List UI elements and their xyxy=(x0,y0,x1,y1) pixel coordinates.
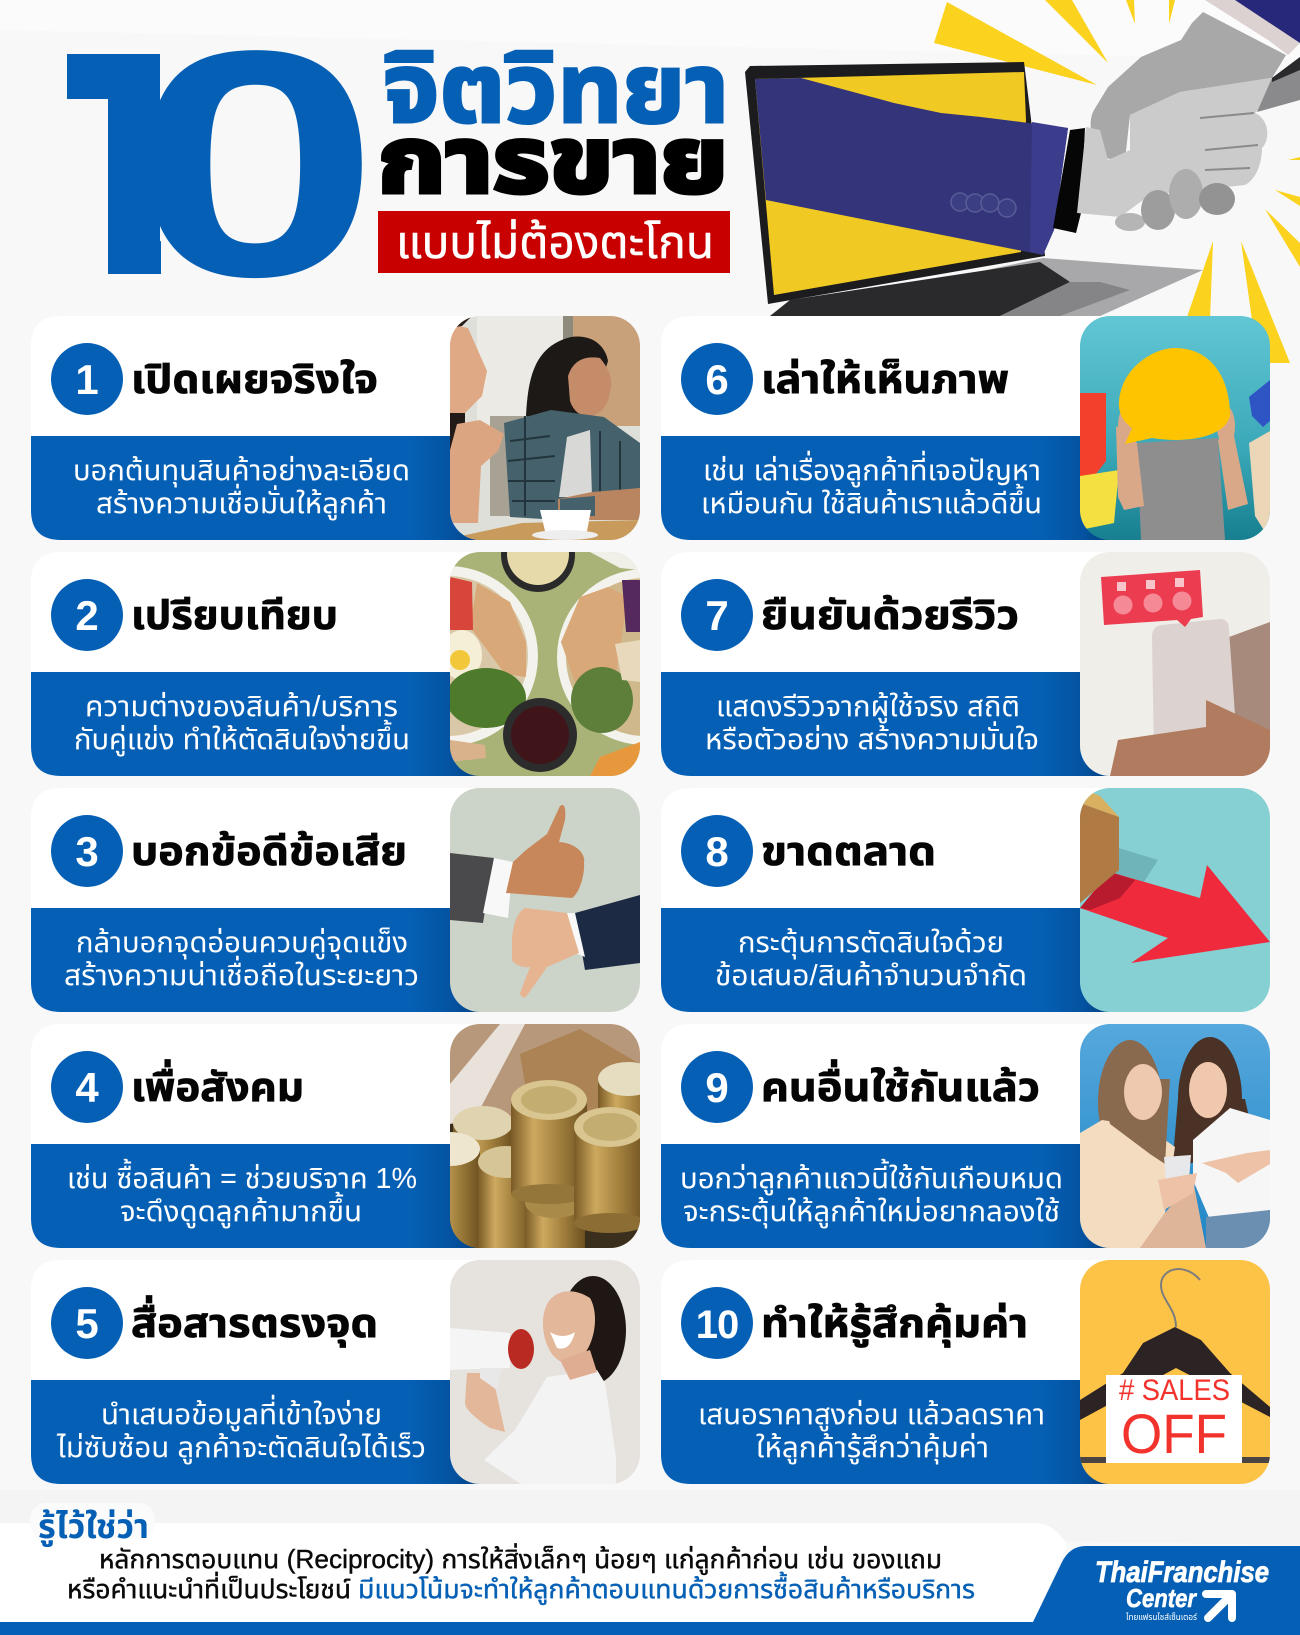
number badge 5 xyxy=(51,1287,123,1359)
number badge 4 xyxy=(51,1051,123,1123)
number badge 6 xyxy=(681,343,753,415)
number badge 1 xyxy=(51,343,123,415)
heading: คนอื่นใช้กันแล้ว xyxy=(761,1059,1040,1110)
photo: stacked tin cans xyxy=(450,1024,640,1248)
description: กระตุ้นการตัดสินใจด้วย xyxy=(738,927,1004,959)
card 3 xyxy=(31,788,640,1012)
photo: phone with review bubble xyxy=(1080,552,1270,776)
heading: เพื่อสังคม xyxy=(131,1059,304,1110)
header illustration: laptop with handshake xyxy=(745,0,1300,363)
description: กับคู่แข่ง ทำให้ตัดสินใจง่ายขึ้น xyxy=(74,719,410,757)
title line: จิตวิทยา: จิตวิทยา xyxy=(383,34,729,143)
heading: บอกข้อดีข้อเสีย xyxy=(131,829,407,874)
description: นำเสนอข้อมูลที่เข้าใจง่าย xyxy=(101,1394,382,1432)
number badge 9: 9 xyxy=(705,1064,729,1111)
description: สร้างความเชื่อมั่นให้ลูกค้า xyxy=(96,483,387,521)
photo: two women looking at a phone xyxy=(1080,1024,1270,1248)
footer text: หลักการตอบแทน (Reciprocity) การให้สิ่งเล็กๆ น้อยๆ แก่ลูกค้าก่อน เช่น ของแถม xyxy=(99,1543,942,1575)
handshake hands xyxy=(1077,12,1286,231)
description: สร้างความน่าเชื่อถือในระยะยาว xyxy=(64,955,419,992)
photo: hanger with sales tag xyxy=(1080,1260,1270,1484)
heading: ขาดตลาด xyxy=(761,830,936,874)
logo: ThaiFranchise Center xyxy=(1033,1546,1300,1622)
number badge 10: 10 xyxy=(696,1303,738,1347)
card 10 xyxy=(661,1260,1270,1484)
footer text with blue highlight: มีแนวโน้มจะทำให้ลูกค้าตอบแทนด้วยการซื้อสินค้าหรือบริการ xyxy=(358,1571,975,1605)
description: บอกต้นทุนสินค้าอย่างละเอียด xyxy=(73,455,410,487)
number badge 8: 8 xyxy=(705,828,729,875)
number badge 3: 3 xyxy=(75,828,99,875)
card 5 xyxy=(31,1260,640,1484)
heading: เล่าให้เห็นภาพ xyxy=(761,357,1009,402)
photo: woman with megaphone xyxy=(450,1260,640,1484)
yellow burst rays xyxy=(934,0,1300,363)
navy jacket sleeve xyxy=(755,78,1068,255)
description: จะดึงดูดลูกค้ามากขึ้น xyxy=(120,1191,362,1229)
card 9 xyxy=(661,1024,1270,1248)
heading: ยืนยันด้วยรีวิว xyxy=(761,593,1019,638)
logo: ThaiFranchise Center: Center xyxy=(1126,1583,1198,1613)
number badge 2 xyxy=(51,579,123,651)
number badge 5: 5 xyxy=(75,1300,99,1347)
number badge 9 xyxy=(681,1051,753,1123)
footer note panel xyxy=(0,1503,1067,1622)
card 6 xyxy=(661,316,1270,540)
heading: สื่อสารตรงจุด xyxy=(131,1295,378,1348)
description: เหมือนกัน ใช้สินค้าเราแล้วดีขึ้น xyxy=(701,483,1042,520)
bottom blue strip xyxy=(0,1622,1300,1635)
photo: couple talking in a cafe xyxy=(450,316,640,540)
description: ไม่ซับซ้อน ลูกค้าจะตัดสินใจได้เร็ว xyxy=(56,1432,426,1465)
description: แสดงรีวิวจากผู้ใช้จริง สถิติ xyxy=(716,691,1020,724)
description: เสนอราคาสูงก่อน แล้วลดราคา xyxy=(698,1399,1045,1432)
logo: ThaiFranchise Center: ThaiFranchise xyxy=(1095,1556,1269,1589)
title line: การขาย: การขาย xyxy=(378,110,728,212)
photo: red arrow and box xyxy=(1080,788,1270,1012)
red subtitle banner: แบบไม่ต้องตะโกน xyxy=(396,216,714,268)
sale sign: # SALES xyxy=(1119,1374,1230,1407)
laptop base xyxy=(770,258,1203,316)
card 1 xyxy=(31,316,640,540)
right shirt cuff and sleeve xyxy=(1205,0,1300,112)
big number 10 xyxy=(67,50,362,278)
number badge 3 xyxy=(51,815,123,887)
number badge 10 xyxy=(681,1287,753,1359)
description: ความต่างของสินค้า/บริการ xyxy=(85,691,398,723)
description: เช่น เล่าเรื่องลูกค้าที่เจอปัญหา xyxy=(703,450,1041,488)
card 8 xyxy=(661,788,1270,1012)
description: บอกว่าลูกค้าแถวนี้ใช้กันเกือบหมด xyxy=(680,1158,1063,1196)
black shirt cuff xyxy=(1053,128,1085,233)
footer text with blue highlight xyxy=(67,1571,975,1605)
laptop lid and yellow screen xyxy=(745,62,1045,304)
sleeve buttons xyxy=(951,193,1016,217)
logo: ThaiFranchise Center: ไทยแฟรนไชส์เซ็นเตอร์ xyxy=(1125,1612,1198,1622)
number badge 4: 4 xyxy=(75,1064,99,1111)
number badge 8 xyxy=(681,815,753,887)
sale sign xyxy=(1106,1374,1242,1465)
number badge 7: 7 xyxy=(705,592,729,639)
photo: food bowls xyxy=(450,552,640,776)
description: หรือตัวอย่าง สร้างความมั่นใจ xyxy=(705,721,1039,756)
icon: arrow xyxy=(1206,1594,1232,1618)
heading: เปรียบเทียบ xyxy=(131,594,338,638)
card 7 xyxy=(661,552,1270,776)
heading: ทำให้รู้สึกคุ้มค่า xyxy=(761,1301,1028,1348)
photo: people holding speech bubbles xyxy=(1080,316,1270,540)
description: กล้าบอกจุดอ่อนควบคู่จุดแข็ง xyxy=(76,927,408,960)
number badge 7 xyxy=(681,579,753,651)
description: ข้อเสนอ/สินค้าจำนวนจำกัด xyxy=(715,960,1027,992)
card 2 xyxy=(31,552,640,776)
footer heading: รู้ไว้ใช่ว่า xyxy=(38,1508,149,1547)
heading: เปิดเผยจริงใจ xyxy=(131,358,378,402)
number badge 2: 2 xyxy=(75,592,99,639)
number badge 6: 6 xyxy=(705,356,729,403)
footer text with blue highlight: หรือคำแนะนำที่เป็นประโยชน์ xyxy=(67,1571,351,1604)
description: จะกระตุ้นให้ลูกค้าใหม่อยากลองใช้ xyxy=(683,1196,1060,1229)
sleeve cuff panel xyxy=(1030,122,1068,255)
description: เช่น ซื้อสินค้า = ช่วยบริจาค 1% xyxy=(67,1158,417,1195)
sale sign: OFF xyxy=(1121,1402,1227,1465)
card 4 xyxy=(31,1024,658,1248)
description: ให้ลูกค้ารู้สึกว่าคุ้มค่า xyxy=(756,1432,989,1465)
number badge 1: 1 xyxy=(75,356,99,403)
photo: thumbs up and thumbs down xyxy=(450,788,640,1012)
